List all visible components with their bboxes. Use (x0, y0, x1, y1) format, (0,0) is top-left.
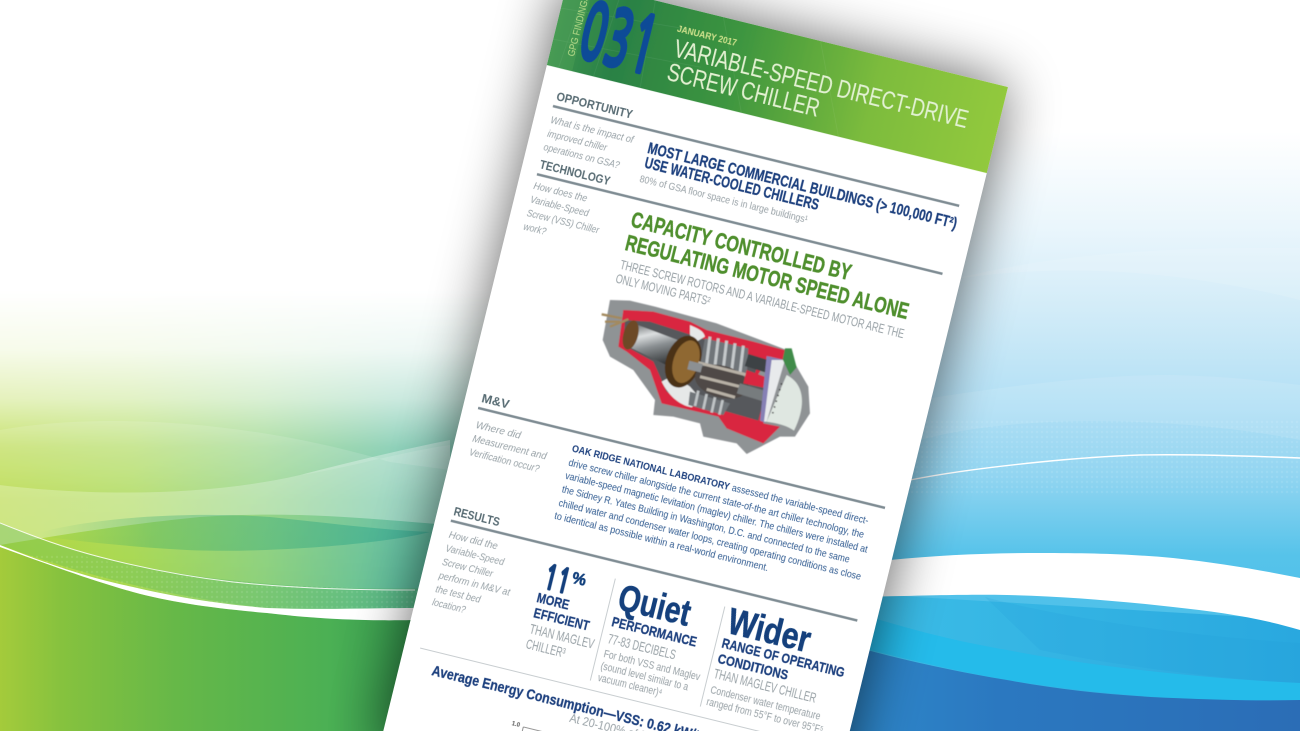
paragraph: Oak Ridge: chilled water and condenser water loops, creating operating conditions as close (557, 497, 862, 583)
question: opportunity: improved chiller (546, 128, 609, 154)
heading: M&V: M&V (480, 393, 511, 412)
lower screw rotor (688, 392, 730, 415)
red cut faces (618, 310, 787, 443)
question: results: location? (431, 596, 467, 616)
heading: results: RESULTS (452, 506, 501, 529)
question: opportunity: What is the impact of (549, 114, 636, 146)
rotor shafts (747, 360, 777, 369)
question: technology (522, 180, 607, 250)
question: technology: Screw (VSS) Chiller (526, 207, 601, 237)
question: results: Variable-Speed (444, 542, 506, 569)
main screw rotor (691, 359, 752, 404)
question: M&V (468, 419, 552, 476)
date: JANUARY 2017 (676, 24, 738, 49)
finding: technology (614, 207, 918, 355)
upper screw rotor (700, 338, 748, 378)
result: 11% more efficient: 11 (541, 561, 574, 599)
background: blue waves (800, 0, 1300, 731)
gas fittings (602, 314, 628, 327)
red divider block (743, 370, 773, 388)
question: technology: work? (522, 221, 548, 238)
page drop shadow (382, 0, 1008, 731)
motor rotor ring (659, 331, 708, 392)
heading: technology: TECHNOLOGY (538, 159, 611, 188)
paragraph: Oak Ridge: to identical as possible within a real-world environment. (553, 510, 770, 574)
result: wider range: Condenser water temperature (709, 684, 822, 723)
question: results: perform in M&V at (437, 569, 512, 599)
result: quiet performance: (sound level similar to a (599, 660, 690, 694)
question: opportunity (542, 114, 636, 173)
end cap (783, 348, 797, 375)
heading: opportunity: OPPORTUNITY (555, 91, 634, 122)
question: M&V: Verification occur? (468, 446, 541, 475)
result: quiet performance: For both VSS and Maglev (602, 648, 702, 684)
finding: opportunity: USE WATER-COOLED CHILLERS (643, 155, 821, 214)
title: SCREW CHILLER (664, 58, 823, 123)
section: measurement and verification (456, 393, 889, 598)
title: VARIABLE-SPEED DIRECT-DRIVE (671, 35, 971, 134)
motor shaft (625, 323, 687, 368)
result: wider range: CONDITIONS (716, 650, 790, 683)
result: quiet performance (596, 576, 719, 707)
paragraph: Oak Ridge (553, 442, 876, 596)
question: results (430, 529, 522, 626)
header band (547, 0, 1008, 173)
question: results: How did the (448, 529, 499, 552)
result: wider range: THAN MAGLEV CHILLER (712, 665, 818, 706)
question: results: Screw Chiller (441, 556, 495, 580)
finding: technology: CAPACITY CONTROLLED BY (629, 207, 854, 285)
question: technology: How does the (532, 180, 589, 205)
end plate (760, 356, 785, 423)
paragraph: Oak Ridge: the Sidney R. Yates Building in Washington, D.C. and connected to the same (561, 483, 851, 566)
result: quiet performance: 77-83 DECIBELS (606, 630, 678, 662)
result: wider range: RANGE OF OPERATING (720, 635, 847, 680)
background: green waves (0, 314, 482, 731)
section: technology (515, 159, 946, 361)
finding: technology: THREE SCREW ROTORS AND A VARIABLE-SPEED MOTOR ARE THE (619, 257, 906, 341)
result: 11% more efficient (524, 560, 611, 667)
result: 11% more efficient: THAN MAGLEV (528, 621, 596, 652)
section: opportunity (540, 91, 965, 261)
question: technology: Variable-Speed (529, 194, 591, 220)
paragraph: Oak Ridge: OAK RIDGE NATIONAL LABORATORY assessed the variable-speed direct- (571, 443, 870, 527)
chart: axis fragment: 1.0 (511, 721, 521, 729)
finding: opportunity: MOST LARGE COMMERCIAL BUILDINGS (> 100,000 FT²) (646, 140, 959, 233)
question: M&V: Measurement and (471, 433, 549, 463)
result: 11% more efficient: EFFICIENT (532, 604, 592, 634)
finding: technology: ONLY MOVING PARTS² (614, 271, 712, 309)
image: screw chiller cutaway (602, 300, 810, 454)
chiller housing (603, 300, 810, 454)
paragraph: Oak Ridge: variable-speed magnetic levitation (maglev) chiller. The chillers were installed at (564, 470, 869, 556)
panel: findings sheet (383, 0, 1008, 731)
question: results: the test bed (434, 583, 483, 606)
paragraph: Oak Ridge: drive screw chiller alongside the current state-of-the art chiller technology, the (567, 457, 865, 541)
white casting (662, 375, 702, 407)
result: quiet performance: Quiet (614, 577, 695, 634)
section: results (421, 506, 861, 731)
chart: axis fragment (506, 721, 563, 731)
stator end (620, 319, 642, 351)
result: wider range (705, 600, 855, 731)
question: M&V: Where did (475, 419, 523, 442)
finding: technology: REGULATING MOTOR SPEED ALONE (623, 230, 911, 324)
result: 11% more efficient: CHILLER³ (524, 635, 567, 661)
finding: opportunity: 80% of GSA floor space is in large buildings¹ (638, 173, 809, 226)
result: 11% more efficient: % (570, 568, 588, 590)
result: quiet performance: PERFORMANCE (610, 613, 699, 650)
inner cavity (623, 320, 767, 421)
question: opportunity: operations on GSA? (542, 141, 621, 172)
result: quiet performance: vacuum cleaner)⁴ (596, 672, 664, 699)
result: wider range: Wider (724, 600, 815, 660)
result: 11% more efficient: MORE (535, 589, 571, 613)
